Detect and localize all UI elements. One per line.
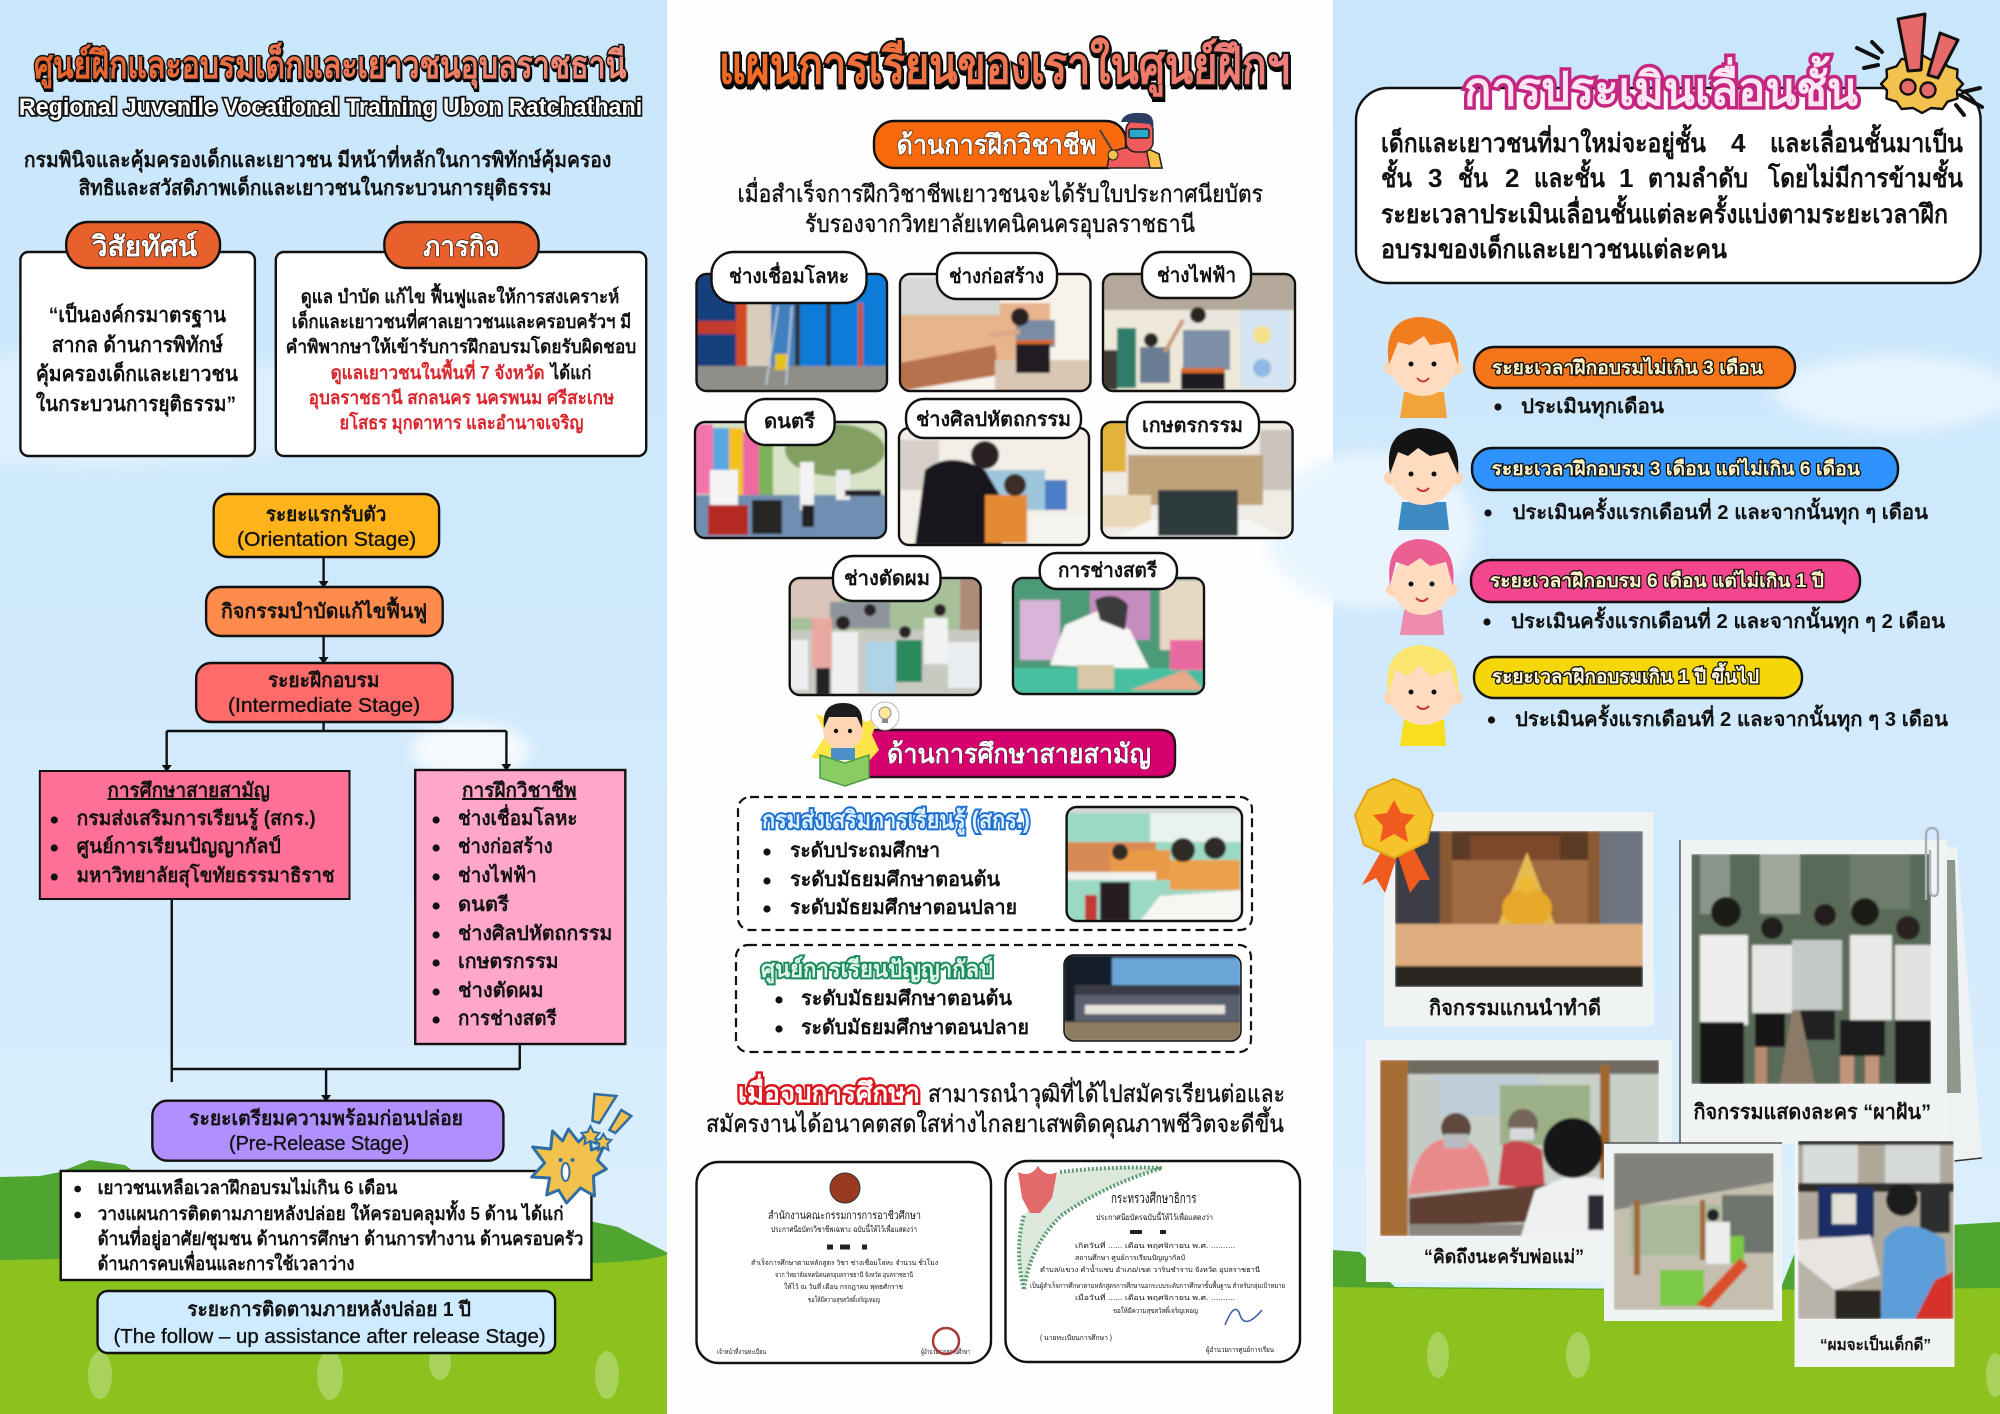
photo: metal welding — [696, 252, 888, 392]
photo: electrical — [1103, 252, 1295, 392]
assessment description: 2 — [1505, 163, 1519, 193]
photo card: family visit: “คิดถึงนะครับพ่อแม่” — [1424, 1246, 1584, 1268]
assessment description: และชั้น — [1534, 158, 1605, 193]
label: women's crafts — [1040, 553, 1177, 589]
stage: follow-up: (The follow – up assistance after release Stage) — [114, 1326, 546, 1348]
title: learning plan: แผนการเรียนของเราในศูนย์ฝึกฯ — [719, 37, 1290, 97]
assessment tier: 3 to 6 months: ประเมินครั้งแรกเดือนที่ 2 และจากนั้นทุก ๆ เดือน — [1512, 497, 1928, 525]
photo card: computer study: “ผมจะเป็นเด็กดี” — [1820, 1333, 1931, 1354]
mission statement: คำพิพากษาให้เข้ารับการฝึกอบรมโดยรับผิดชอบ — [286, 335, 636, 357]
photo card: student leaders at temple — [1384, 812, 1654, 1026]
certificate: ministry of education: เมื่อวันที่ ...... เดือน พฤศจิกายน พ.ศ. .......... — [1075, 1293, 1235, 1302]
certificate: vocational: ให้ไว้ ณ วันที่ เดือน กรกฎาคม พุทธศักราช — [784, 1282, 903, 1291]
title: promotion assessment: การประเมินเลื่อนชั้น — [1464, 55, 1859, 115]
panel: pre-release details: ด้านการคบเพื่อนและการใช้เวลาว่าง — [98, 1250, 354, 1274]
mission statement: ดูแล บำบัด แก้ไข ฟื้นฟูและให้การสงเคราะห์ — [301, 283, 619, 309]
assessment description: อบรมของเด็กและเยาวชนแต่ละคน — [1381, 233, 1727, 264]
photo card: student leaders at temple: กิจกรรมแกนนำทำดี — [1429, 996, 1601, 1020]
intro: vocational: รับรองจากวิทยาลัยเทคนิคนครอุบลราชธานี — [805, 211, 1195, 239]
panel: non-formal education: ระดับมัธยมศึกษาตอนต้น — [790, 868, 1000, 891]
label: women's crafts: การช่างสตรี — [1058, 559, 1157, 582]
panel: non-formal education: กรมส่งเสริมการเรียนรู้ (สกร.) — [762, 807, 1030, 835]
label: handicraft — [906, 399, 1081, 438]
panel: panyakalp learning centre: ศูนย์การเรียนปัญญากัลป์ — [761, 956, 993, 984]
vision statement: “เป็นองค์กรมาตรฐาน — [49, 301, 227, 329]
photo: graduation ceremony — [1064, 955, 1241, 1041]
panel: left background — [0, 0, 668, 1414]
certificate: vocational: สำนักงานคณะกรรมการการอาชีวศึกษา — [768, 1209, 921, 1222]
heading pill: mission: ภารกิจ — [423, 231, 500, 262]
panel: vocational training track: ช่างตัดผม — [458, 980, 544, 1002]
certificate: vocational: ขอให้มีความสุขสวัสดิ์เจริญเทอญ — [808, 1294, 880, 1304]
stage: rehabilitation activities — [206, 587, 443, 636]
panel: non-formal education: ระดับประถมศึกษา — [790, 840, 940, 862]
panel: mission — [276, 222, 646, 456]
vision statement — [36, 301, 239, 417]
subtitle: English name: Regional Juvenile Vocational Training Ubon Ratchathani — [19, 94, 642, 121]
stage: intermediate — [196, 663, 453, 722]
stage: follow-up — [98, 1291, 555, 1353]
certificate: ministry of education: ตำบล/แขวง คำน้ำแซบ อำเภอ/เขต วารินชำราบ จังหวัด อุบลราชธานี — [1040, 1263, 1260, 1274]
intro text: สิทธิและสวัสดิภาพเด็กและเยาวชนในกระบวนการยุติธรรม — [78, 174, 552, 201]
panel: general education track: มหาวิทยาลัยสุโขทัยธรรมาธิราช — [77, 863, 335, 888]
certificate: vocational: จาก วิทยาลัยเทคนิคนครอุบลราชธานี จังหวัด อุบลราชธานี — [775, 1271, 913, 1279]
assessment tier: 3 to 6 months: ระยะเวลาฝึกอบรม 3 เดือน แต่ไม่เกิน 6 เดือน — [1492, 457, 1860, 480]
panel: general education track: กรมส่งเสริมการเรียนรู้ (สกร.) — [77, 807, 316, 832]
assessment tier: up to 3 months — [1474, 347, 1795, 419]
panel: vocational training track: เกษตรกรรม — [458, 951, 559, 973]
photo: music — [695, 399, 886, 538]
panel: centre column — [695, 37, 1300, 1363]
heading pill: vision — [66, 222, 220, 268]
panel: vocational training track: ช่างไฟฟ้า — [458, 863, 537, 887]
label: music: ดนตรี — [764, 410, 815, 433]
icon: child with black hair — [1384, 428, 1463, 530]
label: handicraft: ช่างศิลปหัตถกรรม — [916, 409, 1071, 431]
panel: pre-release details — [61, 1171, 591, 1280]
intro text: กรมพินิจและคุ้มครองเด็กและเยาวชน มีหน้าที่หลักในการพิทักษ์คุ้มครอง — [24, 144, 611, 173]
panel: general education track: การศึกษาสายสามัญ — [108, 780, 270, 802]
certificate: ministry of education: ผู้อำนวยการศูนย์การเรียน — [1206, 1346, 1274, 1354]
heading pill: mission — [384, 222, 539, 268]
panel: right background — [1265, 0, 2000, 1414]
panel: vocational training track: การช่างสตรี — [458, 1007, 557, 1030]
assessment description: 4 — [1731, 128, 1746, 158]
label: agriculture: เกษตรกรรม — [1142, 415, 1243, 437]
stage: pre-release: (Pre-Release Stage) — [229, 1133, 409, 1155]
icon: welder — [1100, 113, 1162, 168]
certificate: ministry of education: เกิดวันที่ ...... เดือน พฤศจิกายน พ.ศ. .......... — [1075, 1241, 1235, 1250]
assessment description: ชั้น — [1381, 158, 1412, 193]
stage: rehabilitation activities: กิจกรรมบำบัดแก้ไขฟื้นฟู — [221, 596, 427, 625]
assessment description: เด็กและเยาวชนที่มาใหม่จะอยู่ชั้น — [1381, 123, 1706, 160]
certificate: ministry of education: ( นายทะเบียนการศึกษา ) — [1040, 1333, 1112, 1342]
label: music — [746, 399, 835, 445]
icon: paperclip — [1926, 828, 1938, 900]
vision statement: คุ้มครองเด็กและเยาวชน — [36, 360, 239, 387]
stage: orientation: ระยะแรกรับตัว — [266, 504, 386, 526]
assessment tier: over 1 year: ระยะเวลาฝึกอบรมเกิน 1 ปี ขึ้นไป — [1492, 662, 1759, 688]
panel: centre background — [667, 0, 1334, 1414]
heading pill: general education: ด้านการศึกษาสายสามัญ — [887, 739, 1151, 770]
vision statement: ในกระบวนการยุติธรรม” — [36, 391, 236, 417]
icon: child with blond hair — [1384, 645, 1463, 746]
icon: exclamation burst — [1857, 14, 1982, 115]
photo: construction — [900, 253, 1091, 392]
photo: hairdressing — [790, 556, 981, 695]
panel: vocational training track — [415, 770, 625, 1044]
label: agriculture — [1127, 402, 1259, 448]
label: construction: ช่างก่อสร้าง — [949, 265, 1044, 288]
icon: child with orange hair — [1384, 317, 1463, 418]
certificate: ministry of education — [1006, 1161, 1300, 1362]
label: electrical: ช่างไฟฟ้า — [1157, 263, 1236, 287]
photo card: back sheet — [1900, 846, 1982, 1165]
photo: nail art — [1013, 553, 1204, 694]
stage: orientation: (Orientation Stage) — [237, 529, 416, 551]
icon: medal — [1355, 779, 1433, 893]
graduation note: สามารถนำวุฒิที่ได้ไปสมัครเรียนต่อและ — [928, 1077, 1285, 1109]
assessment tier: up to 3 months: ประเมินทุกเดือน — [1521, 395, 1664, 419]
certificate: ministry of education: ประกาศนียบัตรฉบับนี้ให้ไว้เพื่อแสดงว่า — [1096, 1211, 1213, 1222]
graduation note: สมัครงานได้อนาคตสดใสห่างไกลยาเสพติดคุณภาพชีวิตจะดีขึ้น — [706, 1106, 1284, 1139]
assessment description: 3 — [1428, 163, 1442, 193]
certificate: ministry of education: สถานศึกษา ศูนย์การเรียนปัญญากัลป์ — [1075, 1253, 1186, 1262]
intro: vocational: เมื่อสำเร็จการฝึกวิชาชีพเยาวชนจะได้รับใบประกาศนียบัตร — [738, 177, 1263, 208]
panel: pre-release details: เยาวชนเหลือเวลาฝึกอบรมไม่เกิน 6 เดือน — [98, 1176, 398, 1198]
heading pill: vocational — [874, 121, 1126, 168]
stage: follow-up: ระยะการติดตามภายหลังปล่อย 1 ปี — [187, 1298, 471, 1321]
assessment tier: 6 months to 1 year — [1471, 560, 1945, 634]
label: metal welding — [712, 252, 866, 303]
assessment description: ชั้น — [1458, 158, 1488, 193]
panel: panyakalp learning centre: ระดับมัธยมศึกษาตอนต้น — [801, 987, 1012, 1010]
label: construction — [937, 253, 1057, 299]
panel: vocational training track: ช่างเชื่อมโลหะ — [458, 803, 578, 830]
certificate: ministry of education: กระทรวงศึกษาธิการ — [1111, 1190, 1197, 1206]
heading pill: vision: วิสัยทัศน์ — [90, 231, 197, 262]
intro text — [24, 144, 611, 201]
photo card: family visit bench — [1604, 1143, 1782, 1321]
photo: classroom — [1066, 807, 1242, 921]
photo card: computer study — [1794, 1141, 1954, 1367]
label: hairdressing: ช่างตัดผม — [844, 568, 930, 590]
panel: general education track — [40, 771, 349, 899]
photo: handicraft — [899, 399, 1090, 545]
certificate: vocational: ผู้อำนวยการสถานศึกษา — [921, 1347, 970, 1356]
panel: left column — [19, 42, 646, 1353]
stage: intermediate: (Intermediate Stage) — [228, 695, 420, 717]
flow arrows — [162, 557, 520, 1102]
panel: pre-release details: วางแผนการติดตามภายหลังปล่อย ให้ครอบคลุมทั้ง 5 ด้าน ได้แก่ — [98, 1200, 564, 1226]
mission statement: ได้แก่ — [549, 361, 591, 383]
stage: orientation — [214, 494, 439, 557]
stage: pre-release: ระยะเตรียมความพร้อมก่อนปล่อย — [189, 1107, 463, 1130]
assessment description: โดยไม่มีการข้ามชั้น — [1767, 158, 1963, 193]
assessment tier: 3 to 6 months — [1472, 448, 1928, 525]
panel: non-formal education: ระดับมัธยมศึกษาตอนปลาย — [790, 897, 1017, 919]
panel: vocational training track: การฝึกวิชาชีพ — [462, 779, 577, 802]
photo card: drama activity — [1680, 840, 1947, 1144]
mission statement — [286, 283, 636, 435]
icon: student reading — [811, 702, 899, 786]
stage: intermediate: ระยะฝึกอบรม — [268, 670, 379, 692]
mission statement: ดูแลเยาวชนในพื้นที่ 7 จังหวัด — [331, 359, 545, 385]
assessment tier: 6 months to 1 year: ระยะเวลาฝึกอบรม 6 เดือน แต่ไม่เกิน 1 ปี — [1490, 569, 1824, 592]
panel: non-formal education — [738, 797, 1252, 930]
assessment tier: 6 months to 1 year: ประเมินครั้งแรกเดือนที่ 2 และจากนั้นทุก ๆ 2 เดือน — [1511, 606, 1945, 634]
assessment description: 1 — [1619, 163, 1633, 193]
panel: pre-release details: ด้านที่อยู่อาศัย/ชุมชน ด้านการศึกษา ด้านการทำงาน ด้านครอบครัว — [98, 1225, 583, 1251]
photo card: family visit — [1366, 1040, 1672, 1282]
assessment tier: over 1 year — [1474, 657, 1948, 732]
icon: surprised star burst — [532, 1094, 631, 1203]
assessment tier: over 1 year: ประเมินครั้งแรกเดือนที่ 2 และจากนั้นทุก ๆ 3 เดือน — [1515, 704, 1948, 732]
panel: panyakalp learning centre: ระดับมัธยมศึกษาตอนปลาย — [801, 1017, 1029, 1039]
certificate: ministry of education: ขอให้มีความสุขสวัสดิ์เจริญเทอญ — [1113, 1305, 1198, 1315]
intro: vocational — [738, 177, 1263, 239]
certificate: vocational: ประกาศนียบัตรวิชาชีพเฉพาะ ฉบับนี้ให้ไว้เพื่อแสดงว่า — [771, 1223, 917, 1234]
assessment description: และเลื่อนชั้นมาเป็น — [1770, 123, 1963, 158]
panel: vocational training track: ดนตรี — [458, 893, 509, 916]
assessment tier: up to 3 months: ระยะเวลาฝึกอบรมไม่เกิน 3 เดือน — [1492, 356, 1763, 379]
panel: promotion assessment — [1356, 55, 1981, 283]
stage: pre-release — [152, 1101, 503, 1161]
panel: vision — [20, 222, 255, 456]
mission statement: อุบลราชธานี สกลนคร นครพนม ศรีสะเกษ — [309, 387, 614, 410]
panel: panyakalp learning centre — [736, 945, 1251, 1052]
assessment description: ตามลำดับ — [1648, 163, 1748, 193]
title: centre name in Thai: ศูนย์ฝึกและอบรมเด็กและเยาวชนอุบลราชธานี — [34, 42, 626, 89]
photo card: drama activity: กิจกรรมแสดงละคร “ผาฝัน” — [1693, 1101, 1931, 1124]
panel: vocational training track: ช่างก่อสร้าง — [458, 835, 553, 858]
assessment description: ระยะเวลาประเมินเลื่อนชั้นแต่ละครั้งแบ่งตามระยะเวลาฝึก — [1381, 194, 1948, 229]
mission statement: ยโสธร มุกดาหาร และอำนาจเจริญ — [340, 411, 583, 435]
icon: child with pink hair — [1386, 539, 1458, 635]
photo: agriculture — [1101, 402, 1293, 539]
heading pill: general education — [858, 730, 1175, 777]
label: hairdressing — [833, 556, 940, 601]
vision statement: สากล ด้านการพิทักษ์ — [52, 333, 224, 357]
label: electrical — [1142, 252, 1251, 298]
label: metal welding: ช่างเชื่อมโลหะ — [729, 261, 849, 288]
graduation note: เมื่อจบการศึกษา — [738, 1073, 920, 1108]
graduation note — [706, 1073, 1285, 1139]
certificate: vocational — [696, 1162, 991, 1363]
panel: vocational training track: ช่างศิลปหัตถกรรม — [458, 923, 612, 945]
certificate: vocational: สำเร็จการศึกษาตามหลักสูตร วิชา ช่างเชื่อมโลหะ จำนวน ชั่วโมง — [751, 1258, 938, 1267]
heading pill: vocational: ด้านการฝึกวิชาชีพ — [896, 130, 1096, 160]
panel: right column — [1355, 14, 1982, 1367]
mission statement: เด็กและเยาวชนที่ศาลเยาวชนและครอบครัวฯ มี — [292, 308, 631, 332]
assessment description — [1381, 123, 1963, 264]
certificate: vocational: เจ้าหน้าที่งานทะเบียน — [717, 1347, 766, 1356]
panel: general education track: ศูนย์การเรียนปัญญากัลป์ — [77, 835, 281, 860]
certificate: ministry of education: เป็นผู้สำเร็จการศึกษาตามหลักสูตรการศึกษานอกระบบระดับการศึกษาขั้นพื้นฐาน สำหรับกลุ่มเป้าหมาย — [1030, 1279, 1285, 1290]
